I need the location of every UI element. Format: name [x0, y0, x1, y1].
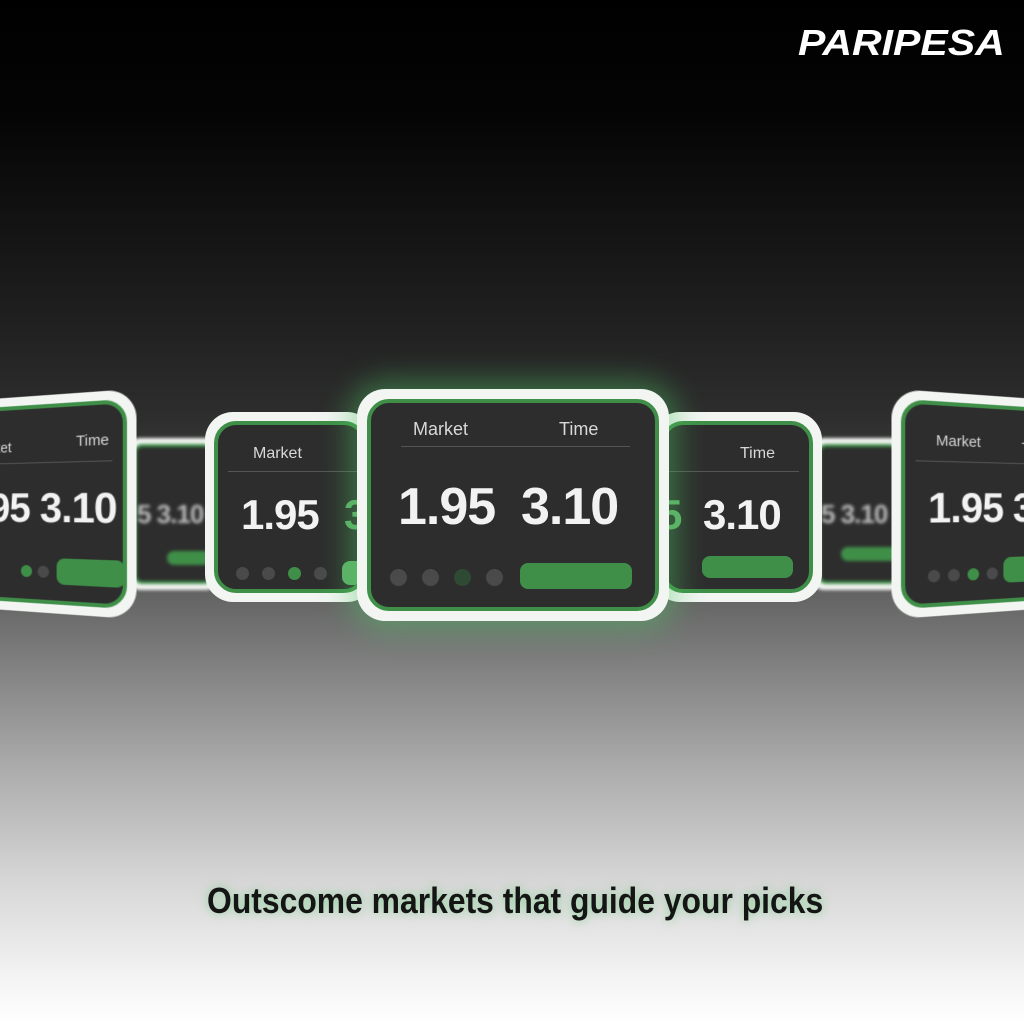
card: small blurred left: 5 3.10: [137, 499, 203, 529]
caption: Outscome markets that guide your picks: [207, 880, 823, 921]
card: left middle: Market: [253, 445, 302, 462]
card: small blurred right: 5 3.10: [821, 499, 887, 529]
card: far left tilted: Time: [76, 431, 109, 450]
card: center highlighted: [357, 389, 669, 621]
card: far left tilted: [0, 389, 137, 619]
card: right middle: 3.10: [703, 491, 781, 538]
card: far right tilted: [891, 389, 1024, 619]
card: center highlighted: Market: [413, 419, 468, 439]
card: left middle: [205, 412, 375, 602]
card: center highlighted: 1.95: [398, 478, 495, 536]
card: center highlighted: Time: [559, 419, 598, 439]
card: left middle: 3: [344, 491, 366, 538]
logo: PARIPESA: [798, 22, 1005, 63]
card: small blurred right: [812, 438, 904, 590]
card: right middle: [652, 412, 822, 602]
card: left middle: 1.95: [241, 491, 319, 538]
card: center highlighted: 3.10: [521, 478, 618, 536]
card: right middle: Time: [740, 445, 775, 462]
card: far right tilted: Market: [936, 432, 981, 451]
card: small blurred left: [128, 438, 218, 590]
